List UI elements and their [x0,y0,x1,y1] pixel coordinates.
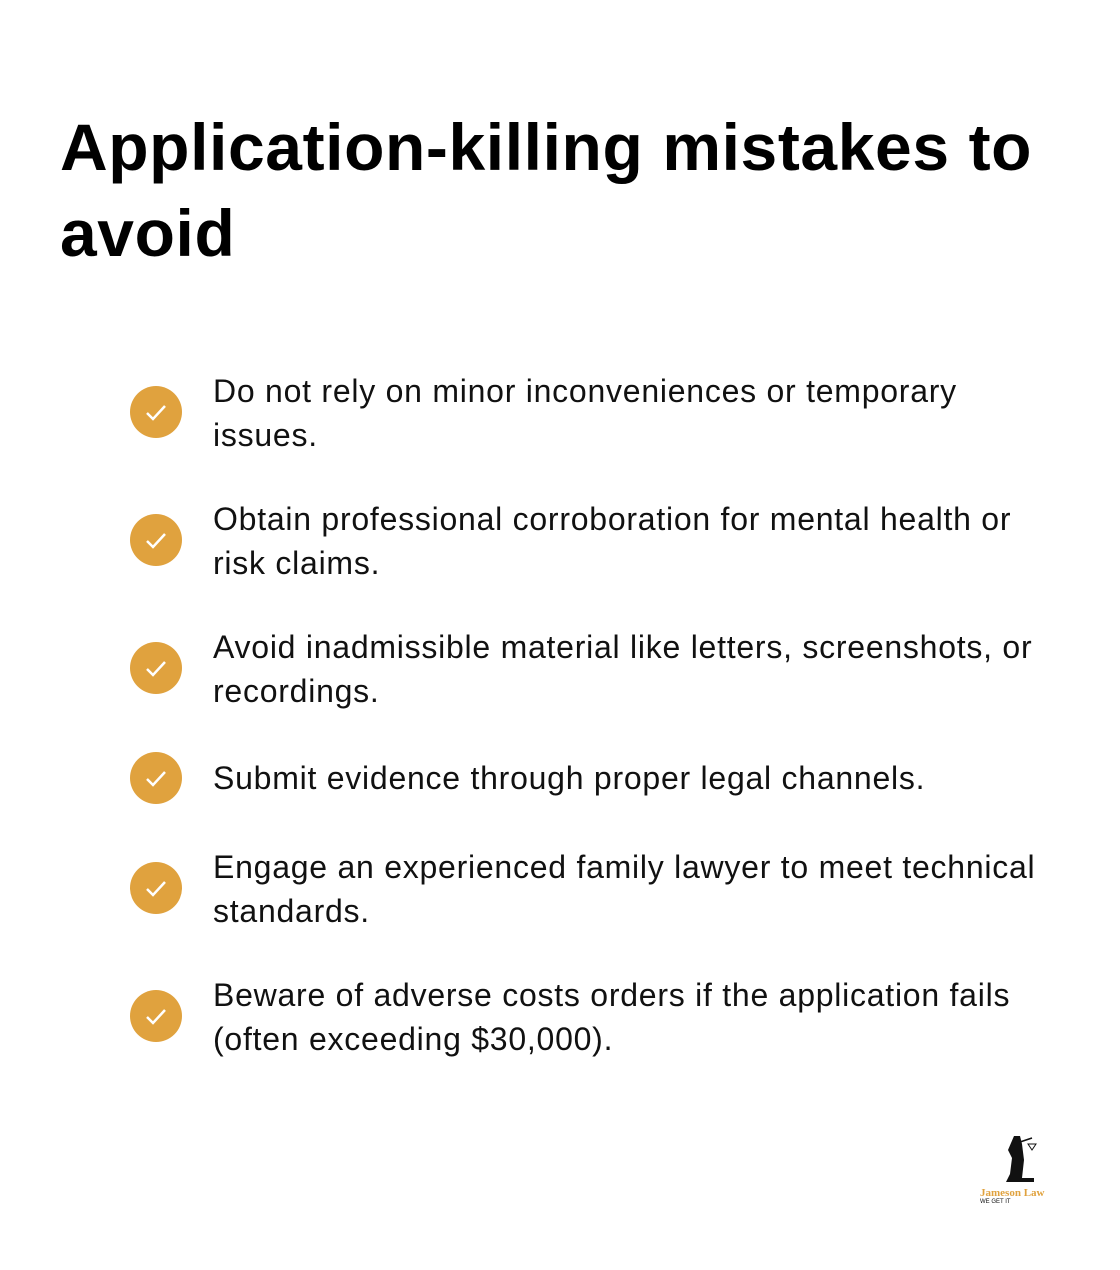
text: issues. [213,417,318,453]
brand text: Jameson Law [980,1187,1044,1199]
text: Beware of adverse costs orders if the application fails [213,977,1010,1013]
icon: justice figure [1006,1136,1037,1182]
icon: check [130,642,182,694]
item 1 [130,373,957,453]
text [213,501,1011,581]
icon: check [130,990,182,1042]
text: recordings. [213,673,380,709]
text [213,977,1010,1057]
text: standards. [213,893,370,929]
title: avoid [60,196,235,270]
icon: check [130,514,182,566]
text: Obtain professional corroboration for mental health or [213,501,1011,537]
icon: check [130,862,182,914]
text: Avoid inadmissible material like letters, screenshots, or [213,629,1032,665]
text [213,849,1035,929]
logo [980,1136,1044,1205]
text: (often exceeding $30,000). [213,1021,613,1057]
text [213,629,1032,709]
text [213,373,957,453]
item 5 [130,849,1035,929]
title [60,110,1032,270]
text: risk claims. [213,545,380,581]
text: Do not rely on minor inconveniences or temporary [213,373,957,409]
icon: check [130,386,182,438]
item 4 [130,752,925,804]
item 3 [130,629,1032,709]
title: Application-killing mistakes to [60,110,1032,184]
text: Submit evidence through proper legal channels. [213,760,925,796]
item 2 [130,501,1011,581]
logo: WE GET IT [980,1199,1011,1205]
item 6 [130,977,1010,1057]
icon: check [130,752,182,804]
text: Engage an experienced family lawyer to meet technical [213,849,1035,885]
